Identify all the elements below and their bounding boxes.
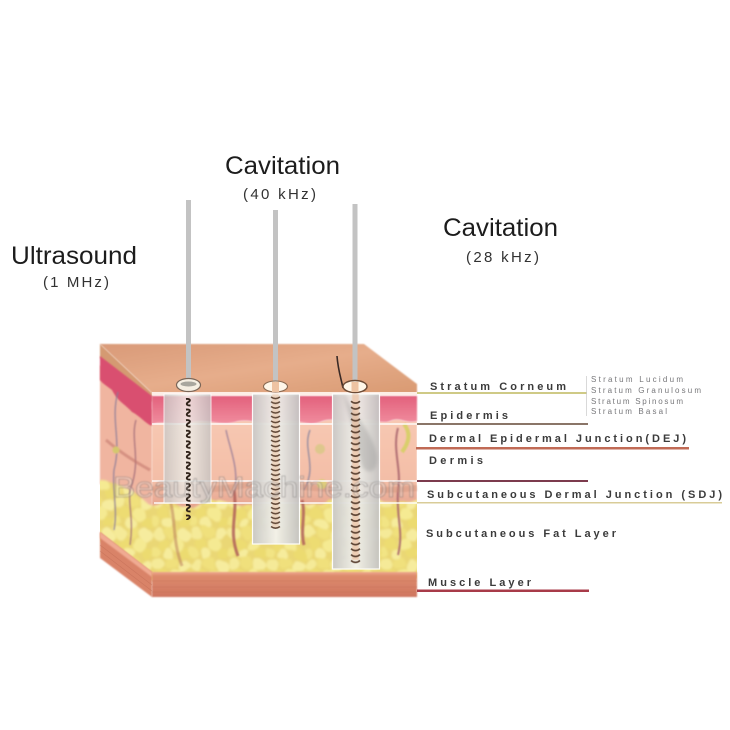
heading: Cavitation 28 kHz (443, 214, 558, 266)
heading: Ultrasound (11, 242, 137, 291)
shaded hair follicle (343, 392, 377, 471)
frequency: (40 kHz) (243, 186, 316, 203)
left face: edge strip (100, 344, 152, 402)
front face: fat layer (148, 498, 428, 580)
watermark: BeautyMachine.com (113, 472, 415, 504)
probe channel: 1 MHz (164, 394, 211, 520)
white layer guide lines (152, 424, 417, 503)
sublayer labels: Stratum Spinosum (591, 397, 683, 406)
heading: Cavitation 40 kHz (225, 152, 340, 203)
layer label: Muscle Layer: Muscle Layer (428, 577, 532, 589)
layer label: Subcutaneous Dermal Junction: Subcutaneous Dermal Junction (SDJ) (427, 489, 722, 501)
layer label: Dermis: Dermis (429, 455, 483, 467)
hair strand (337, 356, 343, 388)
left muscle highlight (100, 532, 152, 577)
front face: epidermis band (152, 396, 417, 424)
white top edge band (152, 392, 417, 396)
sublayer labels: Stratum Basal (591, 407, 667, 416)
blood vessels (106, 392, 417, 566)
probe ring (176, 378, 200, 392)
left face: dermis (100, 365, 152, 510)
fat layer clipped to the block (90, 419, 428, 580)
top face of skin (100, 344, 417, 393)
layer label: Stratum Corneum: Stratum Corneum (430, 381, 566, 393)
layer label: Subcutaneous Fat Layer: Subcutaneous Fat Layer (426, 528, 617, 540)
sublayer labels: Stratum Lucidum (591, 375, 683, 384)
sublayer labels (586, 375, 701, 416)
muscle fibres (100, 545, 417, 592)
heading: Cavitation 40 kHz: Cavitation (225, 152, 340, 180)
sublayer labels: Stratum Granulosum (591, 386, 701, 395)
layer label: Epidermis: Epidermis (430, 410, 508, 422)
left face: fat layer (100, 479, 151, 570)
left face: muscle layer (100, 532, 152, 597)
frequency: (1 MHz) (43, 274, 109, 291)
heading: Ultrasound: Ultrasound (11, 242, 137, 270)
front face: muscle layer (152, 572, 417, 597)
centre rod tint (272, 394, 279, 528)
skin block diagram (90, 344, 428, 597)
probe ring (264, 381, 288, 392)
probe channel: 40 kHz (252, 394, 300, 544)
probe channel: 28 kHz (332, 392, 380, 569)
probe: 40 kHz (264, 210, 288, 392)
heading: Cavitation 28 kHz: Cavitation (443, 214, 558, 242)
probe: 28 kHz (343, 204, 367, 392)
left face: pink epidermis band (100, 356, 152, 426)
front face: dermis (152, 419, 417, 510)
zigzag wave: 1 MHz (184, 398, 193, 520)
probe ring (343, 380, 367, 392)
coil wave: 40 kHz (270, 396, 281, 530)
probe: 1 MHz (176, 200, 200, 392)
coil wave: 28 kHz (350, 400, 361, 565)
layer label: Dermal Epidermal Junction: Dermal Epidermal Junction(DEJ) (429, 433, 686, 445)
frequency: (28 kHz) (466, 249, 539, 266)
centre rod tint (352, 394, 359, 560)
